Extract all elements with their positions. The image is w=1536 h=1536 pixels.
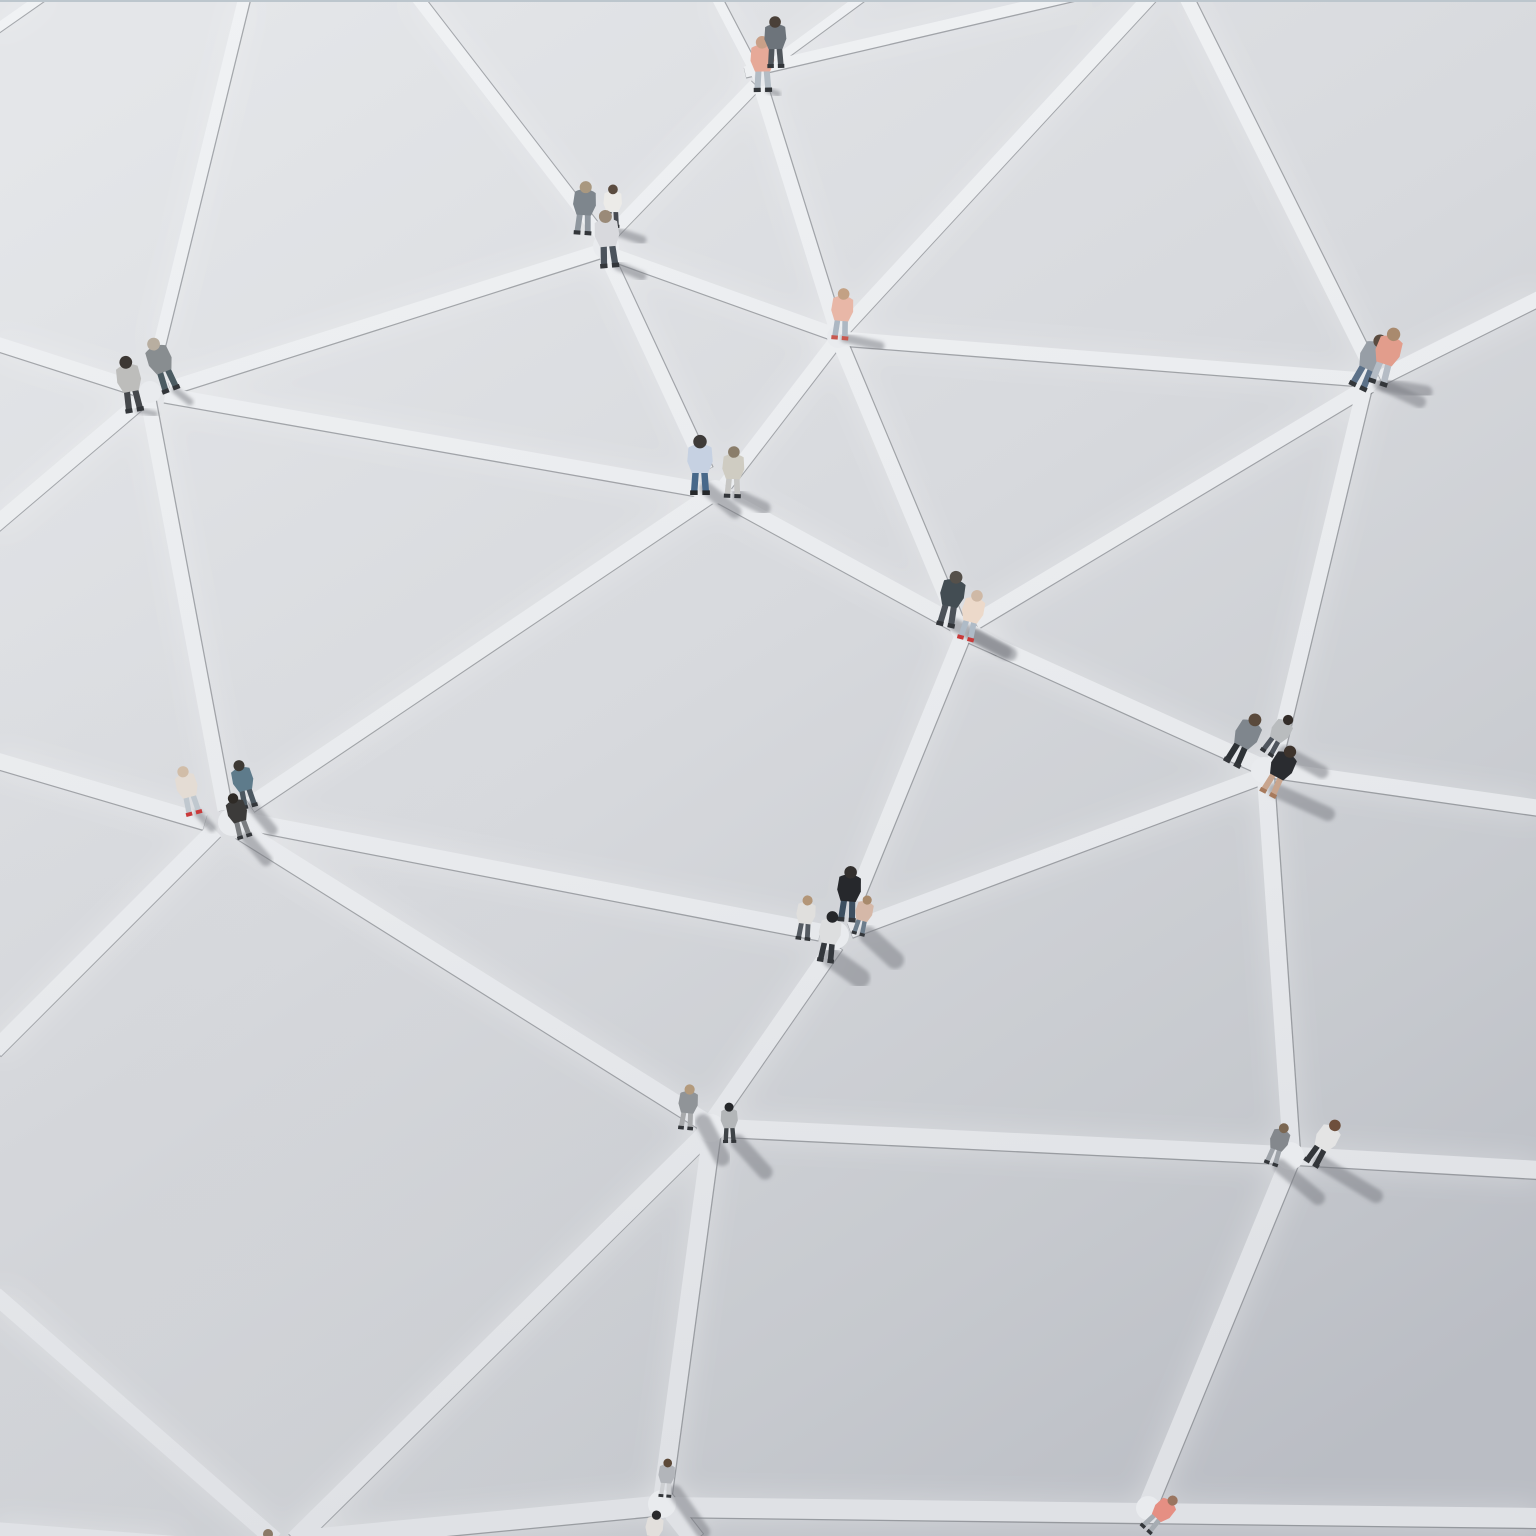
person: pale girl with red shoes (171, 764, 212, 828)
person: woman in grey suit (676, 1083, 722, 1158)
person: woman in light top (1258, 710, 1322, 772)
person: man in black jacket (834, 865, 895, 960)
people group: upper centre (571, 180, 642, 276)
person: woman in peach sweater (954, 587, 1010, 654)
person: man in grey jacket (140, 334, 190, 402)
people group: left (113, 334, 190, 414)
people group: lower left (171, 758, 272, 860)
people group: bottom right (1262, 1115, 1376, 1198)
people group: right (1220, 709, 1328, 814)
person: woman with hair bun (657, 1458, 703, 1532)
person: man in white hoodie (814, 910, 860, 978)
person: woman with dark hair (720, 1102, 765, 1172)
person: woman with beige top (721, 446, 764, 508)
person: person in white shirt (1301, 1115, 1376, 1196)
person: woman with dark hair at edge (641, 1509, 666, 1536)
person: man in dark top (222, 791, 266, 860)
people group: top (750, 16, 787, 94)
people group: centre right (933, 568, 1010, 654)
person: woman in white blouse (793, 894, 818, 941)
person: woman in white (603, 184, 622, 228)
person: man in dark jacket (933, 568, 1005, 652)
person: man in dark trousers (1220, 709, 1269, 770)
lighter lower-left floor tint (0, 600, 800, 1536)
person: woman in peach, centre top (829, 287, 880, 346)
person: woman in light grey (113, 354, 155, 414)
person: man in grey shirt (1346, 330, 1426, 394)
person: man in white shirt (593, 209, 642, 276)
person: woman in tan hair (849, 893, 877, 937)
people group: bottom centre (676, 1083, 765, 1172)
top edge line (0, 0, 1536, 2)
people group: lower centre (793, 865, 895, 978)
people group: centre (687, 435, 764, 512)
people group: upper right (1346, 324, 1426, 402)
person: woman in black top (1257, 741, 1328, 814)
person: man in blue shirt (687, 435, 735, 512)
people group: bottom edge (263, 1458, 1183, 1536)
network: path junctions (139, 70, 1379, 1520)
person: person in grey coat (1262, 1120, 1318, 1198)
person: woman in pink (750, 36, 778, 94)
person: woman in pink top (1365, 324, 1420, 402)
person: man in dark clothes (764, 16, 787, 68)
person: woman in grey jacket (571, 180, 642, 240)
person: woman in pink at edge (1138, 1490, 1183, 1536)
person: head at bottom edge (263, 1529, 273, 1536)
person: man in blue jacket (227, 758, 272, 830)
